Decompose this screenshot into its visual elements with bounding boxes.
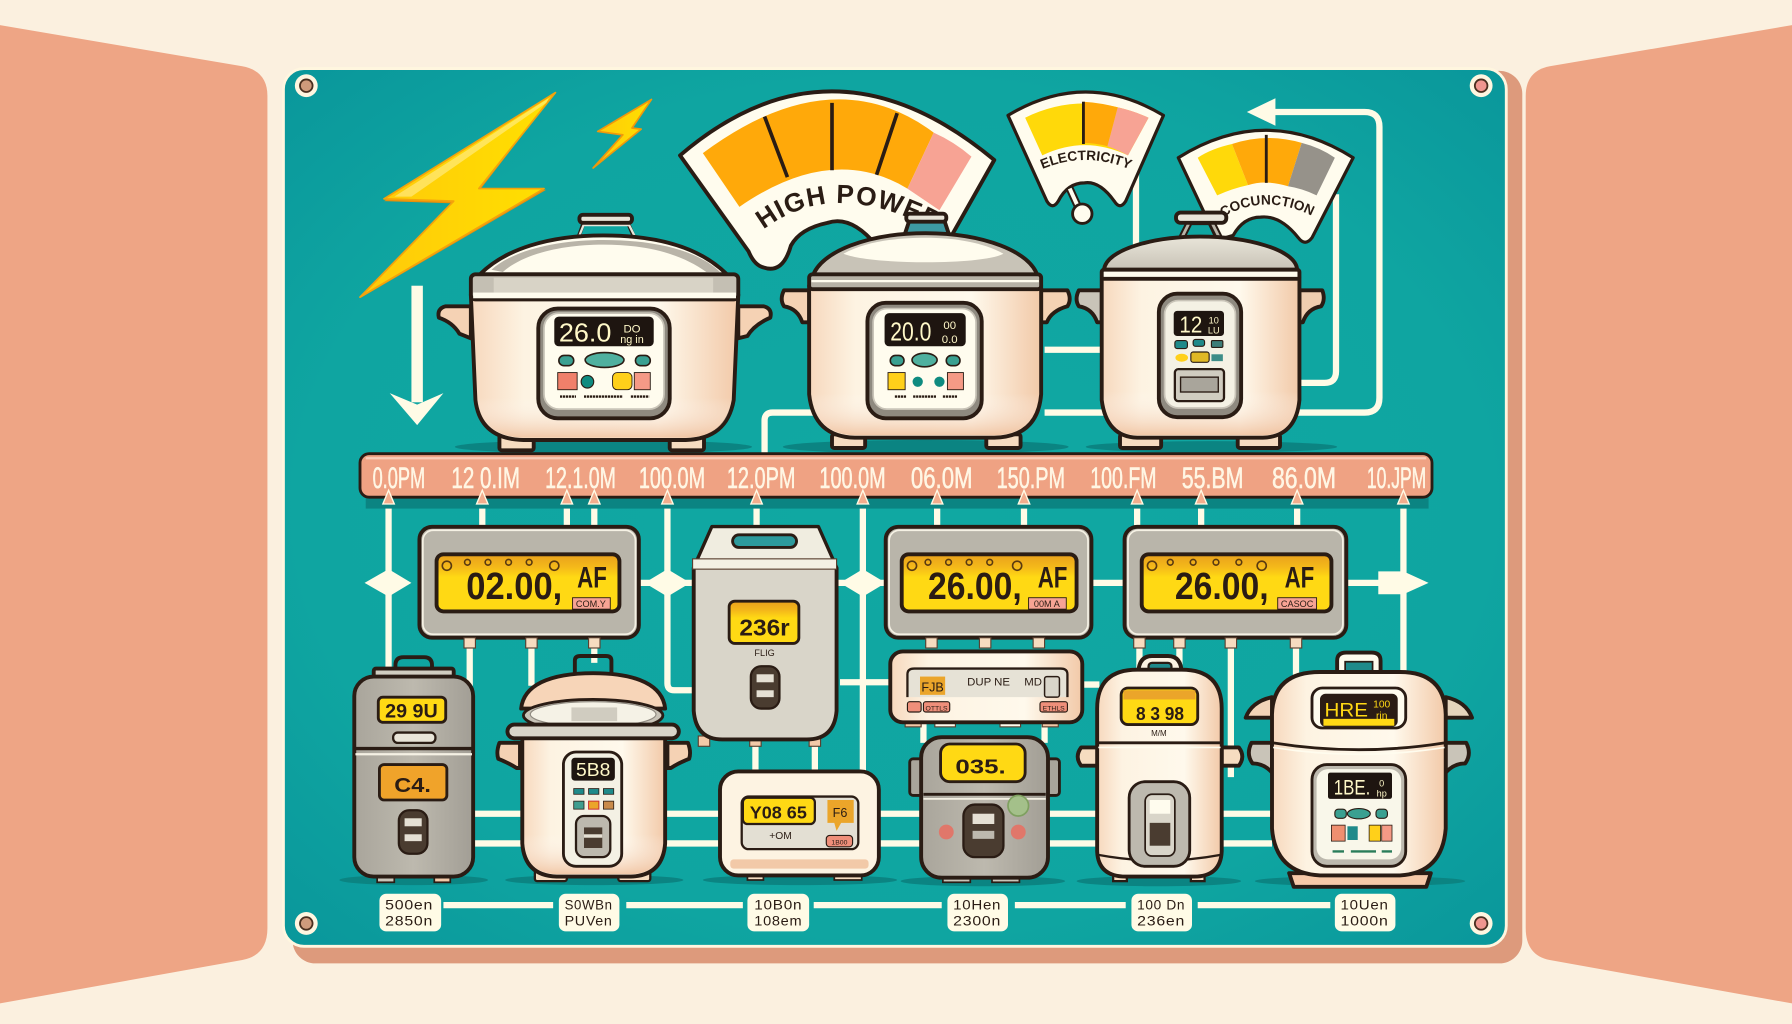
cooker 9 control panel: hp (1377, 789, 1387, 799)
cooker 9: large white: rin (1376, 711, 1388, 722)
shadows under top cookers (455, 440, 1337, 454)
bottom labels (379, 894, 1395, 931)
device: wide display unit: ETHLS (1043, 705, 1065, 712)
label 1: 500en (385, 898, 433, 914)
label 5: 100 Dn (1137, 898, 1185, 914)
cooker 9: large white: 100 (1373, 699, 1391, 710)
timeline labels: 150.PM (997, 462, 1065, 495)
cooker 7: grey compact (910, 737, 1059, 882)
label 1: 2850n (385, 914, 433, 930)
meter 1: AF (577, 561, 607, 594)
arrow: large down arrow (390, 286, 443, 425)
cooker 7: grey compact: 035. (955, 756, 1006, 779)
device: small display unit: +OM (769, 831, 792, 842)
timeline labels: 55.BM (1182, 462, 1243, 495)
gauge label: electricity: ELECTRICITY (1040, 150, 1133, 169)
label 2 (559, 894, 619, 931)
cooker 4: grey tall unit: 29 9U (385, 701, 438, 723)
timeline shadow (366, 494, 1429, 509)
label 3: 108em (754, 914, 802, 930)
label 4 (947, 894, 1008, 931)
label 2: PUVen (565, 914, 613, 930)
cooker 1 control panel (538, 309, 670, 418)
cooker 9 control panel (1312, 765, 1406, 866)
cooker 9: large white: HRE (1325, 700, 1368, 722)
device: wide display unit (890, 651, 1082, 727)
device: small display unit (720, 771, 879, 880)
timeline labels: 12 0.IM (451, 462, 520, 495)
timeline labels: 100.0M (639, 462, 705, 495)
device: small display unit: F6 (833, 806, 847, 820)
cooker 1 control panel: DO (623, 324, 641, 336)
device: small display unit: Y08 65 (750, 802, 807, 822)
left salmon side panel (0, 25, 267, 1003)
device: small display unit: 1B00 (831, 840, 848, 847)
cooker 2 control panel: 0.0 (942, 334, 958, 346)
cooker 2 control panel (867, 303, 982, 418)
cooker 1 (438, 215, 771, 450)
meter 4: CASOC (1281, 599, 1314, 609)
timeline labels: 06.0M (911, 462, 973, 495)
label 4: 10Hen (953, 898, 1001, 914)
timeline bar (360, 454, 1432, 497)
timeline labels: 12.1.0M (545, 462, 616, 495)
gauge: electricity (1006, 90, 1166, 225)
label 6 (1335, 894, 1395, 931)
device: wide display unit: DUP NE (967, 677, 1010, 689)
cooker 4: grey tall unit (354, 657, 473, 882)
label 6: 1000n (1341, 914, 1389, 930)
gauge label: conduction: COCUNCTION (1220, 195, 1315, 216)
meter 3: AF (1038, 561, 1067, 594)
device: wide display unit: FJB (921, 680, 944, 694)
meter 1 (419, 527, 639, 648)
cooker 3 control panel: LU (1208, 326, 1220, 336)
meter 4 (1125, 527, 1346, 648)
label 1 (379, 894, 441, 931)
fryer device: FLIG (754, 648, 775, 658)
connector lines (389, 112, 1403, 905)
label 2: S0WBn (565, 898, 613, 914)
cooker 8: white tall: M/M (1151, 729, 1167, 738)
meter 3: 26.00, (928, 565, 1022, 607)
cooker 5: glass lid (497, 656, 690, 881)
icon: small lightning bolt (593, 99, 651, 168)
timeline labels: 86.0M (1272, 462, 1336, 495)
cooker 9 control panel: 0 (1379, 778, 1384, 788)
label 6: 10Uen (1341, 898, 1389, 914)
diamonds and right arrow head (365, 569, 1429, 597)
fryer device (693, 527, 837, 746)
gauge: high power (678, 89, 996, 271)
cooker 5 control panel (563, 752, 622, 866)
device: wide display unit: MD (1024, 677, 1042, 689)
meter 3: 00M A (1034, 599, 1061, 609)
gauge label: high power: HIGH POWER (754, 184, 938, 228)
cooker 2 control panel: 00 (943, 320, 956, 332)
timeline labels: 10.JPM (1367, 462, 1426, 495)
timeline arrow heads (383, 490, 1409, 504)
cooker 3 control panel: 10 (1209, 315, 1219, 325)
timeline labels: 100.FM (1090, 462, 1157, 495)
meter 4: AF (1285, 561, 1314, 594)
gauge needle (1070, 189, 1092, 223)
cooker 4: grey tall unit: C4. (394, 774, 431, 797)
cooker 2 (782, 214, 1070, 448)
shadows under lower devices (339, 875, 1465, 886)
cooker 8: white tall: 8 3 98 (1136, 703, 1184, 724)
timeline labels: 0.0PM (373, 462, 425, 495)
arrow: feedback arrow head (1247, 98, 1275, 126)
label 5 (1131, 894, 1192, 931)
gauge: conduction (1176, 128, 1355, 244)
meter 1: COM.Y (576, 599, 606, 609)
board shadow (293, 71, 1522, 963)
cooker 8: white tall (1078, 656, 1242, 881)
cooker 3 control panel: 12 (1179, 312, 1202, 338)
cooker 2 control panel: 20.0 (890, 317, 931, 347)
meter 1: 02.00, (466, 565, 562, 607)
cooker 9 control panel: 1BE. (1334, 774, 1370, 799)
right salmon side panel (1526, 25, 1792, 1003)
cooker 3 (1077, 213, 1324, 448)
timeline labels: 100.0M (819, 462, 886, 495)
meter 4: 26.00, (1175, 565, 1269, 607)
cooker 5 control panel: 5B8 (576, 759, 610, 780)
fryer device: 236r (739, 614, 790, 640)
label 4: 2300n (953, 914, 1001, 930)
cooker 1 control panel: 26.0 (559, 318, 611, 348)
main teal board (283, 69, 1506, 946)
label 3: 10B0n (754, 898, 802, 914)
timeline labels (373, 462, 1426, 495)
label 5: 236en (1137, 914, 1185, 930)
icon: large lightning bolt (360, 93, 555, 298)
cooker 1 control panel: ng in (620, 334, 644, 346)
corner screws (295, 74, 1493, 935)
meter 3 (886, 527, 1091, 648)
timeline labels: 12.0PM (727, 462, 795, 495)
cooker 9: large white (1246, 653, 1472, 887)
device: wide display unit: OTTLS (926, 705, 948, 712)
label 3 (747, 894, 809, 931)
cooker 3 control panel (1159, 294, 1241, 417)
